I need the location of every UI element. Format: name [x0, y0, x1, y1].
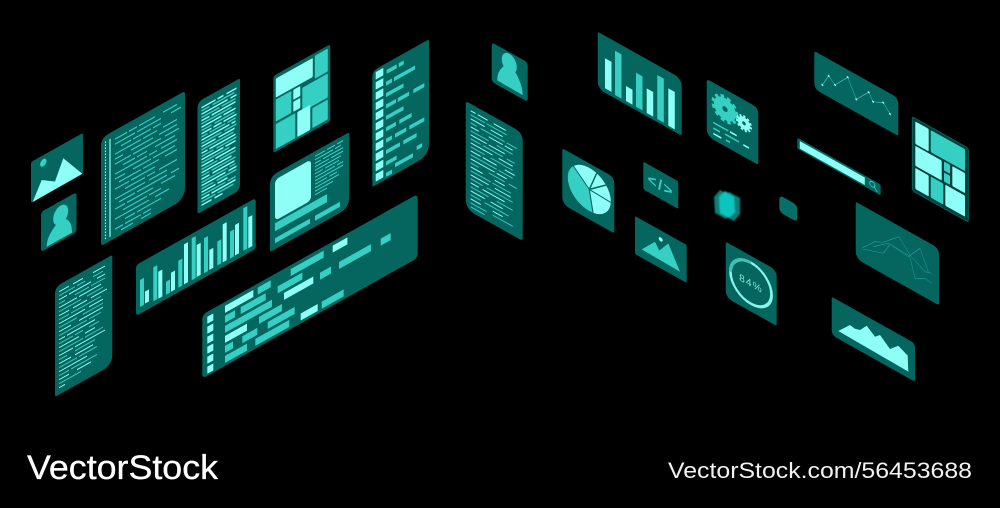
row bullets: [207, 313, 213, 374]
icon: glowing hexagon: [714, 190, 740, 221]
bars: [605, 45, 675, 129]
list text bars: [386, 49, 424, 177]
icon: code brackets: </>: [648, 170, 674, 202]
panel: settings with gears: [707, 79, 758, 165]
settings text lines: [713, 122, 749, 154]
code lines bright: [471, 111, 515, 223]
panel: code tag icon: [643, 162, 678, 209]
icon: sun dot: [40, 157, 46, 168]
panel: dense code column: [198, 78, 240, 214]
treemap cells: [915, 121, 965, 217]
data markers: [821, 62, 891, 124]
panel: progress ring 84%: [726, 242, 777, 326]
panel: right user profile: [492, 42, 528, 102]
watermark: image url: VectorStock.com/56453688: [668, 458, 972, 483]
caption text lines: [315, 141, 343, 195]
table bars bright: [225, 237, 347, 363]
icon: magnifier: [870, 180, 877, 192]
panel: media card with text: [270, 132, 349, 252]
panel: multi-line chart: [856, 202, 939, 305]
icon: large gear: [713, 90, 737, 128]
ring gauge: [730, 251, 772, 315]
panel: large code listing with line numbers: [101, 91, 185, 246]
bar chart: right seven bars: [598, 32, 682, 136]
panel: search bar: [797, 138, 881, 195]
list bullets: [376, 68, 383, 182]
panel: right treemap: [912, 117, 968, 222]
bar chart: left wide: [136, 198, 256, 316]
code lines bright: [59, 265, 107, 388]
image placeholder: [275, 160, 311, 221]
panel: area chart: [832, 297, 915, 382]
code lines: [115, 102, 181, 233]
icon: person silhouette: [497, 47, 523, 95]
code lines teal: [202, 91, 236, 202]
icon: moon dot: [659, 236, 663, 243]
gauge value: 84%: [739, 272, 763, 296]
text bars: [275, 187, 340, 243]
pie: [568, 156, 611, 223]
table bars teal: [225, 213, 391, 363]
icon: person silhouette: [47, 199, 72, 247]
icon: small gear: [737, 112, 751, 134]
panel: left user profile: [41, 192, 76, 252]
panel: navigation list: [372, 39, 429, 187]
panel: right code listing: [466, 101, 523, 241]
panel: line chart with markers: [814, 51, 898, 136]
code lines teal: [59, 270, 105, 384]
panel: left treemap: [273, 44, 330, 153]
panel: wide table with bullets: [202, 194, 418, 379]
search input: [800, 141, 865, 185]
panel: left landscape image: [31, 133, 83, 203]
panel: lower-left code listing: [55, 255, 112, 397]
icon: mountains: [33, 148, 82, 202]
polyline: [822, 63, 890, 123]
line number dots: [104, 141, 106, 239]
panel: mountain image: [635, 216, 687, 283]
panel: pie chart: [562, 148, 614, 233]
watermark: brand name: VectorStock: [27, 449, 219, 487]
code lines teal: [471, 115, 517, 233]
icon: mountain: [642, 228, 680, 272]
panel: small blank tile: [779, 195, 797, 222]
area shape: [838, 310, 908, 372]
chart lines: [863, 216, 932, 288]
bars: [140, 203, 252, 309]
code lines bright: [202, 88, 236, 205]
treemap cells: [276, 48, 328, 149]
gutter rule: [109, 139, 111, 237]
